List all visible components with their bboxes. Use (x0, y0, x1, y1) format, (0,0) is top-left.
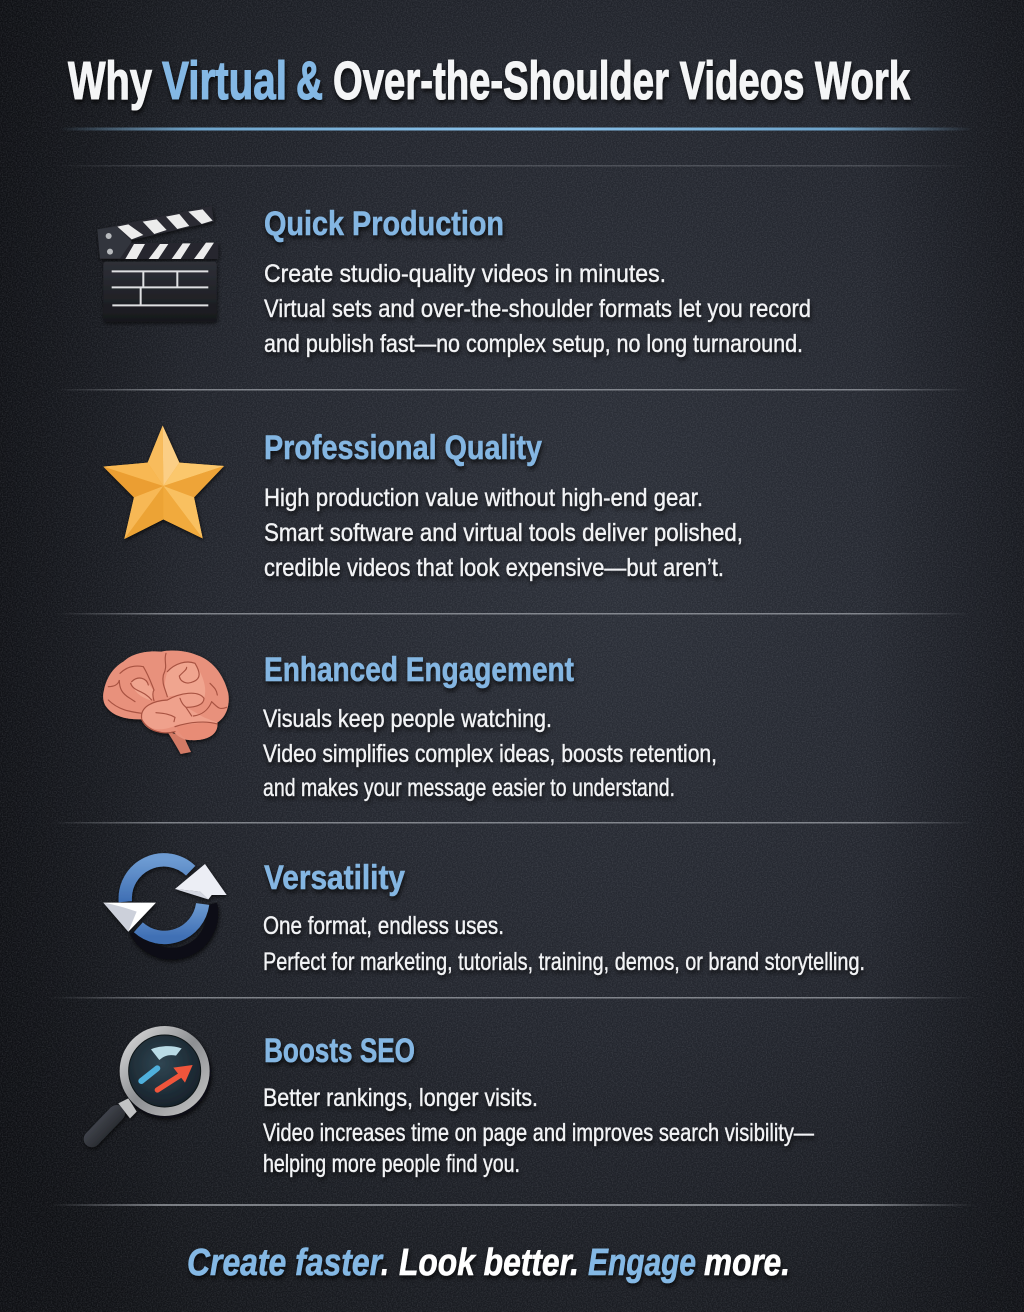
heading: Versatility (264, 859, 405, 897)
footer tagline: Create faster (187, 1242, 384, 1284)
heading: Enhanced Engagement (264, 651, 574, 689)
icon: magnifying glass (92, 1026, 211, 1139)
text block: Visuals keep people watching. (263, 705, 552, 733)
panel: quick production (97, 205, 811, 358)
title: Why (68, 51, 152, 111)
panel: boosts seo (92, 1026, 814, 1178)
text block: Smart software and virtual tools deliver polished, (264, 519, 743, 547)
footer tagline: Look better. (399, 1242, 579, 1284)
title (68, 51, 911, 111)
heading: Professional Quality (264, 429, 542, 467)
footer tagline (187, 1242, 790, 1284)
text block (264, 260, 811, 358)
text block (263, 705, 717, 802)
text block: credible videos that look expensive—but aren’t. (264, 554, 724, 582)
text block (263, 912, 865, 976)
text block: and publish fast—no complex setup, no long turnaround. (264, 330, 803, 358)
text block: One format, endless uses. (263, 912, 504, 940)
text block: High production value without high-end gear. (264, 484, 703, 512)
icon: brain (103, 651, 229, 754)
icon: clapperboard (97, 206, 218, 322)
footer tagline: . (381, 1242, 389, 1284)
text block: Create studio-quality videos in minutes. (264, 260, 666, 288)
title: & (296, 51, 323, 111)
panel: enhanced engagement (103, 651, 717, 802)
footer tagline: Engage (588, 1242, 696, 1284)
text block: Perfect for marketing, tutorials, training, demos, or brand storytelling. (263, 948, 865, 976)
text block: and makes your message easier to understand. (263, 774, 675, 802)
text block: helping more people find you. (263, 1150, 520, 1178)
title: Virtual (162, 51, 287, 111)
text block (264, 484, 743, 582)
text block: Video increases time on page and improves search visibility— (263, 1119, 814, 1147)
text block (263, 1084, 814, 1178)
footer tagline: more. (704, 1242, 790, 1284)
text block: Better rankings, longer visits. (263, 1084, 538, 1112)
heading: Quick Production (264, 205, 504, 243)
text block: Virtual sets and over-the-shoulder formats let you record (264, 295, 811, 323)
text block: Video simplifies complex ideas, boosts retention, (263, 740, 717, 768)
icon: refresh arrows (103, 860, 227, 954)
icon: star (103, 426, 224, 539)
panel: professional quality (103, 426, 743, 582)
heading: Boosts SEO (264, 1032, 415, 1070)
panel: versatility (103, 859, 865, 976)
